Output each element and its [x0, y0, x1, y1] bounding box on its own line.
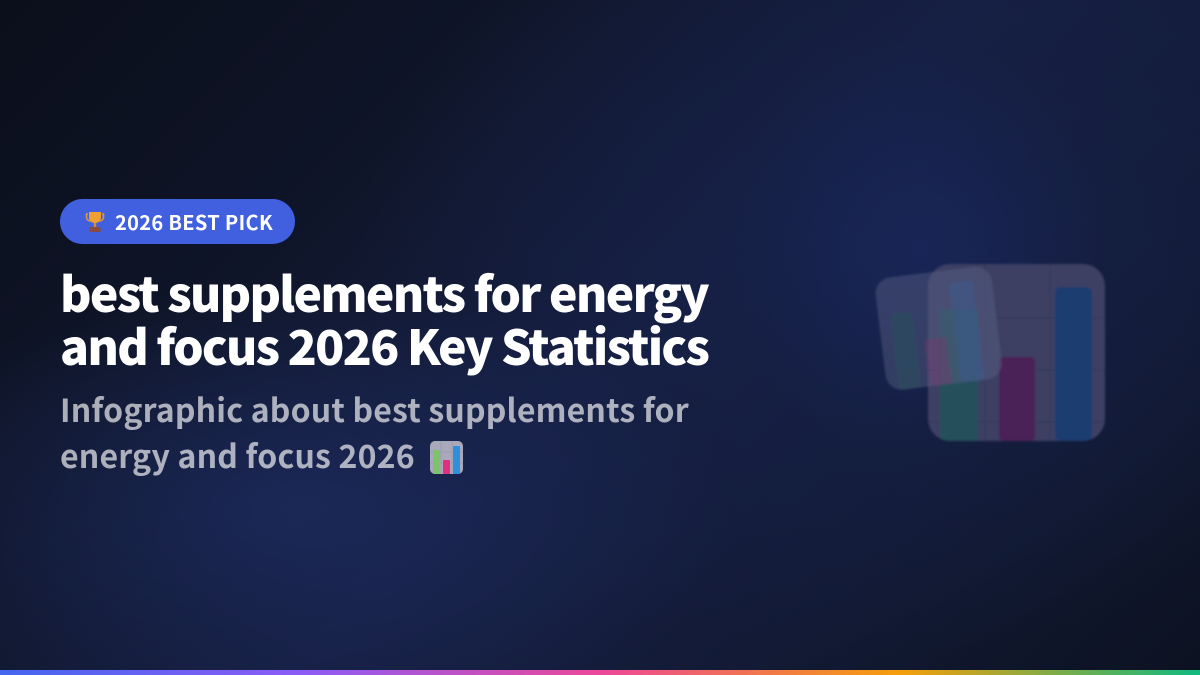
title: best supplements for energy [60, 256, 708, 326]
title: and focus 2026 Key Statistics [60, 309, 708, 379]
tilted chart tile [874, 265, 1004, 392]
subtitle: Infographic about best supplements for [60, 386, 689, 432]
rainbow bottom bar [0, 670, 1200, 675]
subtitle [60, 386, 689, 478]
illustration: blurred bar chart emoji [875, 263, 1106, 442]
badge: 2026 best pick [60, 199, 295, 244]
subtitle: energy and focus 2026 [60, 432, 415, 478]
title [60, 256, 709, 379]
icon: small bar chart emoji [430, 441, 463, 474]
large chart tile [928, 264, 1105, 441]
badge: 2026 best pick: 2026 BEST PICK [115, 207, 273, 236]
icon: trophy [86, 212, 104, 232]
